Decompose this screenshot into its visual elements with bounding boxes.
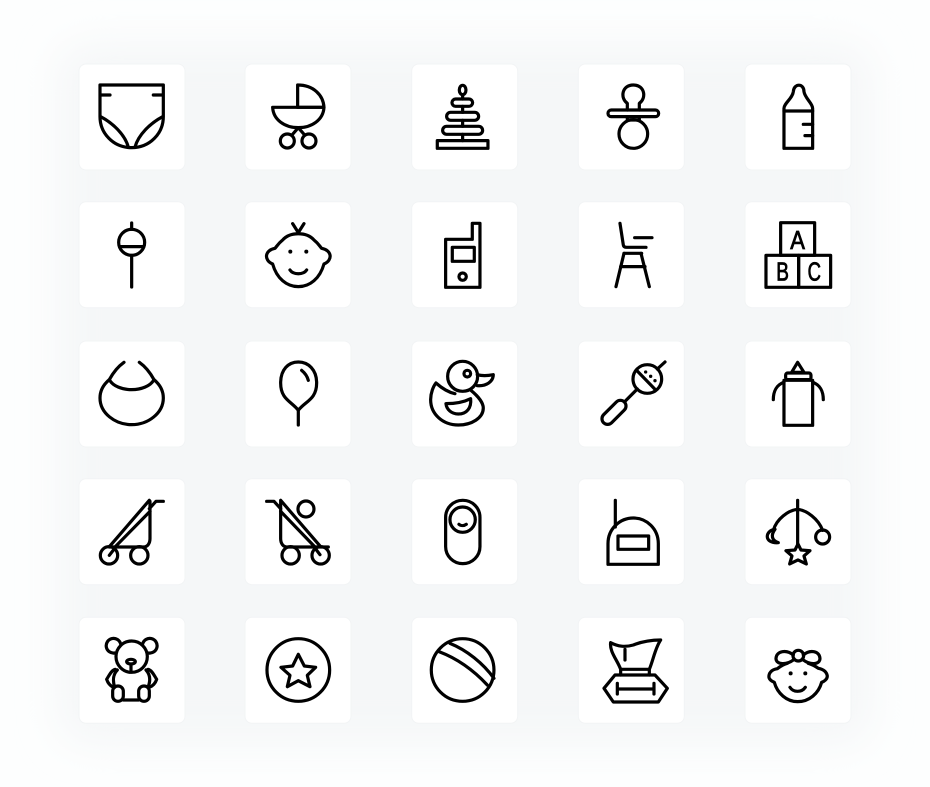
card: star ball	[245, 617, 351, 723]
icon: crib mobile	[767, 500, 830, 564]
icon: baby girl face	[769, 650, 827, 702]
card: baby monitor	[578, 479, 684, 585]
card: stroller left	[79, 479, 185, 585]
card: hand rattle	[578, 341, 684, 447]
icon: rubber duck	[431, 361, 493, 425]
icon: feeding bottle	[784, 85, 813, 148]
card: baby face	[245, 202, 351, 308]
card: stroller right	[245, 479, 351, 585]
card: stacking toy	[412, 64, 518, 170]
icon: stacking rings	[437, 85, 488, 148]
card: diaper	[79, 64, 185, 170]
card: teddy bear	[79, 617, 185, 723]
icon: baby monitor handset	[446, 223, 480, 287]
icon: stroller facing right with baby	[267, 500, 329, 564]
icon: striped ball	[431, 639, 494, 701]
card: baby carriage	[245, 64, 351, 170]
icon: rattle	[119, 223, 145, 287]
card: wipes box	[578, 617, 684, 723]
icon: sippy cup	[773, 362, 823, 425]
icon: star in circle	[267, 639, 330, 701]
card: ABC blocks	[745, 202, 851, 308]
card: bib	[79, 341, 185, 447]
card: crib mobile	[745, 479, 851, 585]
card: rattle	[79, 202, 185, 308]
icon: teddy bear	[106, 638, 157, 701]
card: walkie talkie	[412, 202, 518, 308]
card: rubber duck	[412, 341, 518, 447]
icon: balloon	[281, 362, 317, 425]
card: baby girl face	[745, 617, 851, 723]
icon: pacifier	[608, 85, 659, 148]
card: high chair	[578, 202, 684, 308]
icon: hand rattle	[600, 362, 665, 427]
card: swaddled baby	[412, 479, 518, 585]
icon: wipes box	[604, 640, 667, 702]
icon: baby monitor	[608, 500, 658, 564]
card: striped ball	[412, 617, 518, 723]
card: feeding bottle	[745, 64, 851, 170]
card: balloon	[245, 341, 351, 447]
icon: bib	[100, 362, 163, 425]
icon: baby carriage	[273, 85, 324, 148]
card: sippy cup	[745, 341, 851, 447]
card: pacifier	[578, 64, 684, 170]
icon: swaddled baby	[446, 500, 480, 564]
icon: ABC blocks	[766, 223, 831, 287]
icon: stroller facing left	[100, 500, 163, 564]
icon: diaper	[100, 85, 163, 148]
icon: ABC blocks: A	[790, 225, 806, 255]
icon: baby face	[266, 224, 330, 287]
background glow behind the icon grid	[58, 44, 872, 744]
icon: high chair	[616, 223, 652, 287]
icon: ABC blocks: B	[776, 256, 789, 286]
icon: ABC blocks: C	[808, 256, 821, 286]
